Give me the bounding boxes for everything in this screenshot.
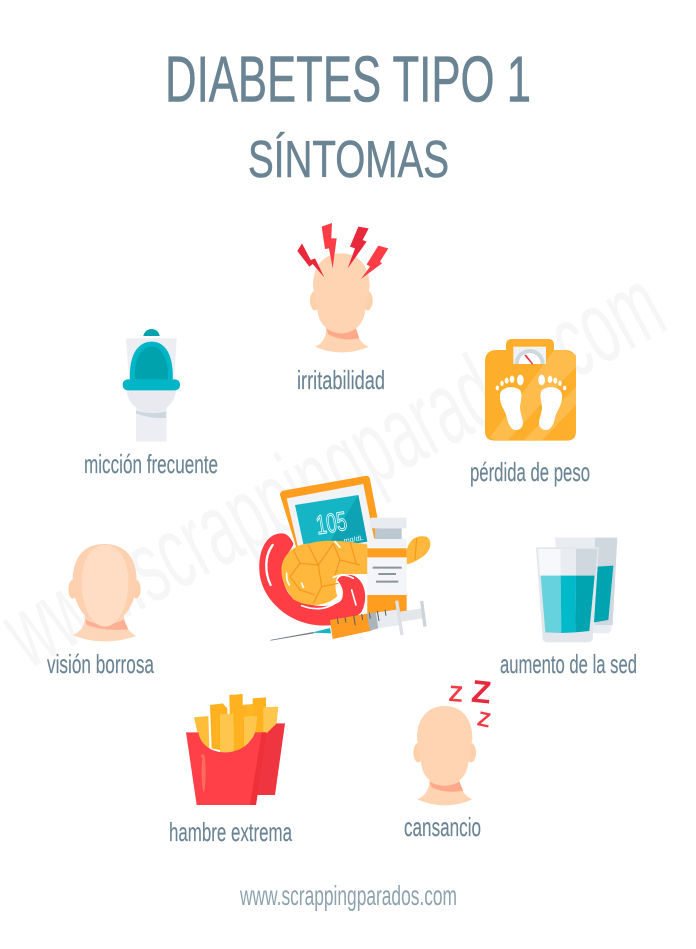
icon: french fries — [186, 694, 285, 805]
label: micción frecuente: micción frecuente — [84, 449, 218, 479]
insulin vial — [367, 518, 407, 613]
icon: bathroom scale — [485, 339, 576, 441]
subtitle: SÍNTOMAS — [248, 131, 449, 189]
stomach highlights — [302, 575, 356, 609]
label: irritabilidad: irritabilidad — [297, 365, 385, 395]
glucose meter: mg/dL — [343, 535, 364, 545]
icon: head with lightning bolts — [297, 223, 388, 352]
glucose meter: 105 — [314, 506, 349, 540]
illustration: glucose meter, pancreas, vial and syringe — [259, 476, 430, 641]
stomach — [259, 533, 365, 626]
icon: sleepy head with Z letters: Z — [448, 680, 464, 707]
pancreas — [281, 536, 430, 605]
icon: toilet — [123, 329, 180, 442]
syringe — [270, 601, 425, 641]
glucose meter — [280, 476, 385, 570]
label: visión borrosa: visión borrosa — [47, 649, 154, 679]
icon: sleepy head with Z letters: Z — [470, 673, 493, 711]
title: DIABETES TIPO 1 — [165, 42, 531, 116]
website footer: www.scrappingparados.com — [239, 880, 457, 911]
icon: glasses of water — [536, 538, 617, 642]
icon: sleepy head with Z letters — [413, 673, 493, 805]
label: pérdida de peso: pérdida de peso — [470, 457, 590, 487]
icon: sleepy head with Z letters: Z — [475, 707, 493, 733]
label: hambre extrema: hambre extrema — [169, 817, 292, 847]
label: cansancio: cansancio — [404, 812, 481, 842]
icon: blurred-vision head — [68, 544, 141, 641]
